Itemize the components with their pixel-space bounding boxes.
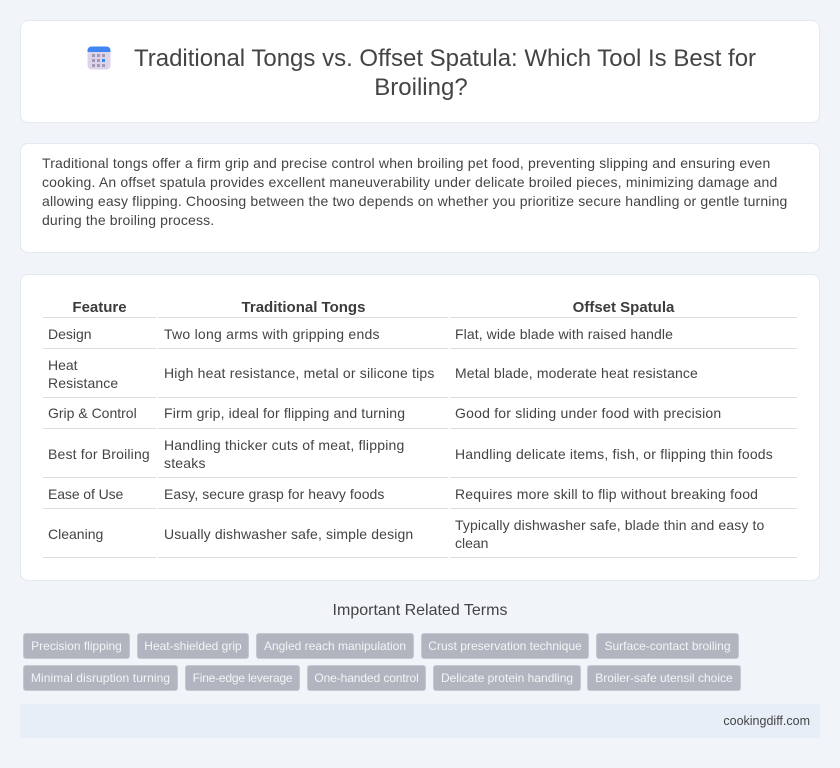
- tag: [596, 633, 739, 659]
- row: best for broiling: [43, 437, 797, 478]
- row: design: Flat, wide blade with raised handle: [455, 326, 673, 342]
- tag: [137, 633, 249, 659]
- row: ease of use: Easy, secure grasp for heavy foods: [164, 486, 384, 502]
- tag: Heat-shielded grip: [144, 639, 242, 653]
- row: best for broiling: Handling thicker cuts of meat, flipping: [164, 437, 404, 453]
- intro text: [42, 155, 787, 228]
- tag: Crust preservation technique: [428, 639, 582, 653]
- tag: Precision flipping: [31, 639, 122, 653]
- tag: Fine-edge leverage: [193, 671, 292, 685]
- row: cleaning: clean: [455, 535, 488, 551]
- tag: [23, 633, 130, 659]
- row: heat resistance: High heat resistance, metal or silicone tips: [164, 365, 435, 381]
- tag: [256, 633, 414, 659]
- tag: [185, 665, 300, 691]
- footer source: cookingdiff.com: [723, 714, 810, 728]
- tag: [587, 665, 741, 691]
- panel: introduction: [20, 143, 820, 253]
- row: heat resistance: [43, 357, 797, 398]
- tag: Delicate protein handling: [441, 671, 573, 685]
- row: cleaning: Typically dishwasher safe, blade thin and easy to: [455, 517, 764, 533]
- title: Traditional Tongs vs. Offset Spatula: Which Tool Is Best for: [134, 45, 756, 72]
- heading: important related terms: Important Related Terms: [333, 602, 507, 619]
- intro text: allowing easy flipping. Choosing between the two depends on whether you prioritize secure handling or gentle turning: [42, 193, 787, 209]
- row: best for broiling: Handling delicate items, fish, or flipping thin foods: [455, 446, 773, 462]
- tag: One-handed control: [314, 671, 419, 685]
- tag: Minimal disruption turning: [31, 671, 170, 685]
- icon: calendar: [88, 46, 110, 70]
- title: [134, 45, 756, 101]
- tag group: related terms: [23, 633, 741, 691]
- row: grip and control: Good for sliding under food with precision: [455, 405, 721, 421]
- row: grip and control: Firm grip, ideal for flipping and turning: [164, 405, 405, 421]
- tag: [421, 633, 589, 659]
- row: cleaning: Usually dishwasher safe, simple design: [164, 526, 413, 542]
- intro text: during the broiling process.: [42, 212, 214, 228]
- row: cleaning: [43, 517, 797, 558]
- tag: Angled reach manipulation: [264, 639, 406, 653]
- row: heat resistance: Resistance: [48, 375, 118, 391]
- row: grip and control: [43, 405, 797, 429]
- tag: Surface-contact broiling: [604, 639, 731, 653]
- row: heat resistance: Metal blade, moderate heat resistance: [455, 365, 698, 381]
- row: ease of use: Requires more skill to flip without breaking food: [455, 486, 758, 502]
- row: design: Design: [48, 326, 92, 342]
- row: design: Two long arms with gripping ends: [164, 326, 380, 342]
- tag: Broiler-safe utensil choice: [595, 671, 733, 685]
- intro text: cooking. An offset spatula provides excellent maneuverability under delicate broiled pieces, minimizing damage and: [42, 174, 777, 190]
- row: cleaning: Cleaning: [48, 526, 103, 542]
- row: heat resistance: Heat: [48, 357, 78, 373]
- tag: [23, 665, 178, 691]
- row: ease of use: [43, 486, 797, 509]
- title: Broiling?: [374, 74, 468, 101]
- panel: comparison table: [20, 274, 820, 581]
- header row: [43, 299, 797, 318]
- intro text: Traditional tongs offer a firm grip and precise control when broiling pet food, preventing slipping and ensuring even: [42, 155, 770, 171]
- panel: title card: [20, 20, 820, 123]
- row: best for broiling: Best for Broiling: [48, 446, 150, 462]
- header row: Feature: [72, 299, 127, 316]
- footer bar: [20, 704, 820, 738]
- header row: Offset Spatula: [573, 299, 674, 316]
- row: best for broiling: steaks: [164, 455, 206, 471]
- tag: [307, 665, 426, 691]
- tag: [433, 665, 581, 691]
- row: ease of use: Ease of Use: [48, 486, 123, 502]
- row: design: [43, 326, 797, 349]
- header row: Traditional Tongs: [242, 299, 365, 316]
- row: grip and control: Grip & Control: [48, 405, 137, 421]
